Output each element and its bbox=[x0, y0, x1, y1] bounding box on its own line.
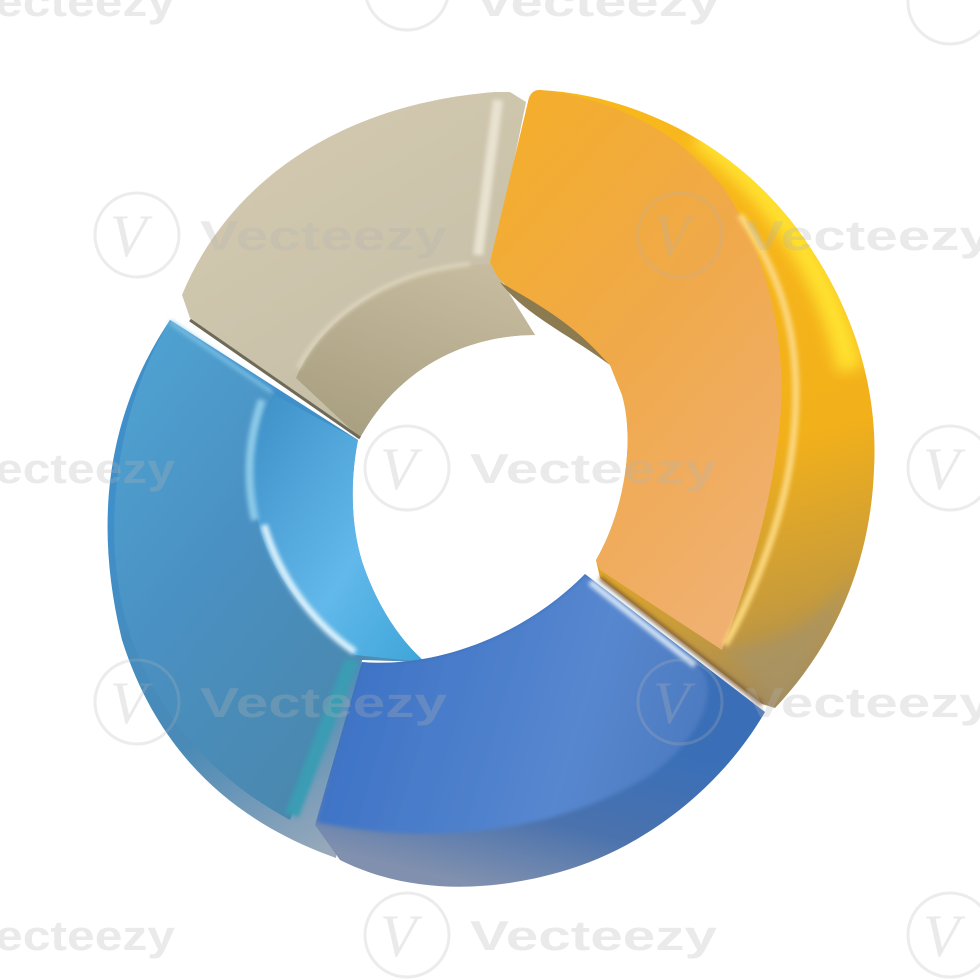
watermarks: Vecteezy bbox=[745, 212, 980, 259]
segment: yellow bbox=[490, 90, 875, 708]
dark blue face bbox=[316, 574, 708, 834]
watermarks: V bbox=[653, 203, 696, 269]
watermarks: Vecteezy bbox=[470, 445, 718, 492]
segment: dark blue bbox=[315, 574, 765, 887]
segment: light blue bbox=[108, 320, 425, 858]
watermarks: V bbox=[110, 670, 153, 736]
segment: beige bbox=[182, 92, 535, 438]
light blue inner wall bbox=[252, 395, 425, 662]
watermarks: V bbox=[923, 436, 966, 502]
watermarks: V bbox=[380, 436, 423, 502]
watermarks: Vecteezy bbox=[200, 679, 448, 726]
watermarks: Vecteezy bbox=[745, 679, 980, 726]
watermarks: V bbox=[380, 903, 423, 969]
watermarks: V bbox=[110, 203, 153, 269]
watermarks: V bbox=[653, 670, 696, 736]
yellow front face bbox=[490, 90, 781, 650]
watermarks: Vecteezy bbox=[470, 912, 718, 959]
light blue face bbox=[114, 320, 355, 820]
beige inner wall bbox=[296, 264, 535, 438]
watermarks: Vecteezy bbox=[200, 212, 448, 259]
watermarks: V bbox=[923, 903, 966, 969]
